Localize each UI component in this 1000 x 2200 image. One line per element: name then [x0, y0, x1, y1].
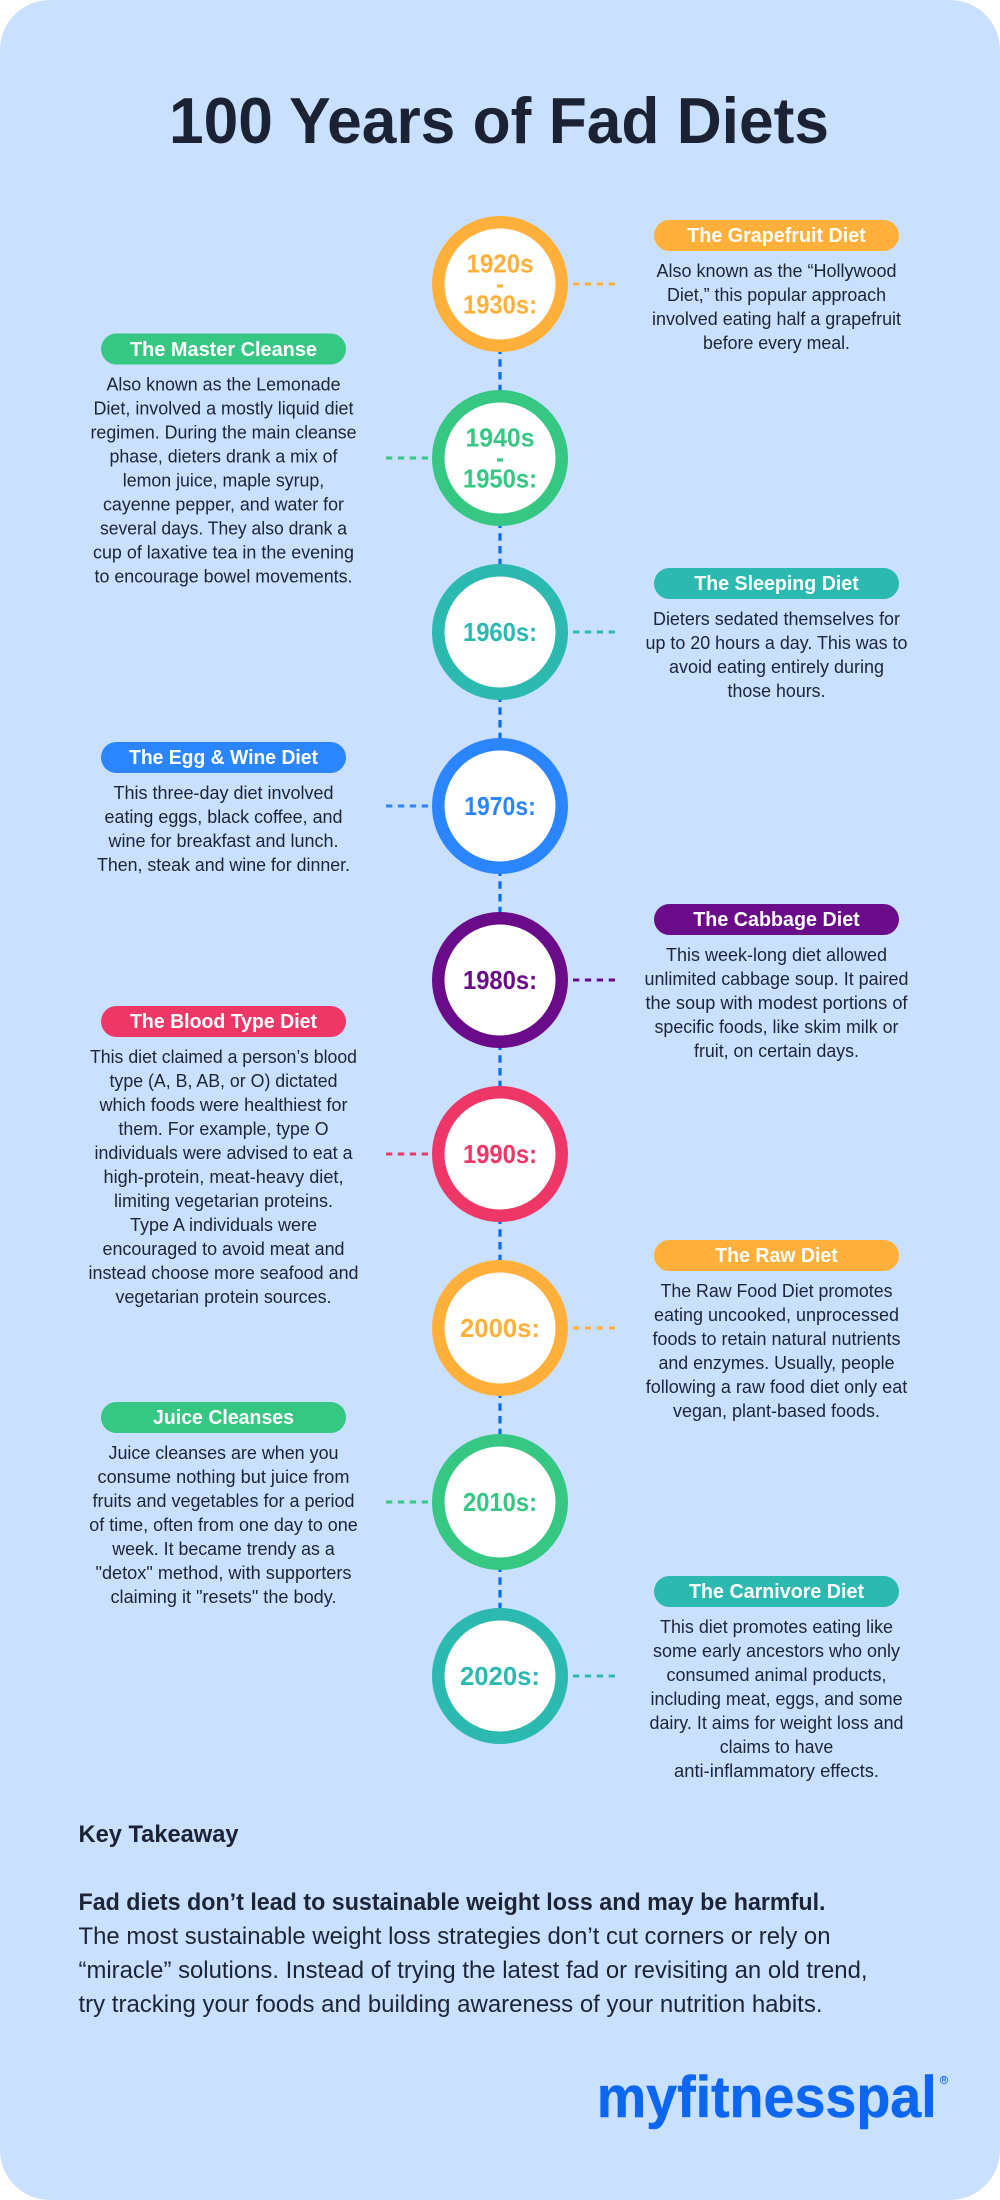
description: carnivore diet: consumed animal products, [666, 1665, 886, 1685]
year badge: 2010s [438, 1440, 562, 1564]
panel: 1940s master cleanse [90, 334, 562, 586]
dashed connector [386, 804, 428, 808]
year badge: 1920s-1930s: 1920s [466, 248, 534, 278]
description: carnivore diet [650, 1617, 904, 1781]
description: carnivore diet: This diet promotes eating like [660, 1617, 893, 1637]
pill: The Blood Type Diet [101, 1006, 346, 1037]
pill: The Egg & Wine Diet: The Egg & Wine Diet [129, 747, 318, 769]
year badge: 1970s [438, 744, 562, 868]
description: blood type diet [88, 1047, 358, 1307]
text block: key takeaway summary: The most sustainable weight loss strategies don’t cut corners or rely on [78, 1923, 830, 1950]
description: master cleanse: phase, dieters drank a mix of [110, 446, 338, 466]
year badge: 1920s-1930s [438, 222, 562, 346]
pill: The Master Cleanse: The Master Cleanse [130, 339, 317, 361]
pill: The Sleeping Diet [654, 568, 899, 599]
dashed connector [573, 282, 615, 286]
description: raw diet: and enzymes. Usually, people [658, 1353, 894, 1373]
description: juice cleanses: Juice cleanses are when you [108, 1443, 338, 1463]
description: juice cleanses [89, 1443, 358, 1607]
year badge: 1960s: 1960s: [463, 617, 537, 647]
year badge: 2000s [438, 1266, 562, 1390]
year badge: 1940s-1950s [438, 396, 562, 520]
year badge: 1940s-1950s: 1940s [466, 422, 534, 452]
timeline connectors [498, 346, 502, 1612]
pill: The Grapefruit Diet [654, 220, 899, 251]
description: master cleanse: cup of laxative tea in the evening [93, 542, 354, 562]
description: juice cleanses: of time, often from one day to one [89, 1515, 358, 1535]
panel: 1920s grapefruit diet [438, 220, 901, 353]
description: blood type diet: instead choose more seafood and [88, 1263, 358, 1283]
dashed connector [386, 1152, 428, 1156]
description: cabbage diet: specific foods, like skim milk or [654, 1017, 899, 1037]
dashed connector [573, 630, 615, 634]
pill: The Raw Diet [654, 1240, 899, 1271]
description: grapefruit: involved eating half a grapefruit [652, 309, 901, 329]
description: sleeping diet [646, 609, 908, 701]
pill: The Master Cleanse [101, 334, 346, 364]
pill: The Cabbage Diet [654, 904, 899, 935]
description: juice cleanses: fruits and vegetables for a period [92, 1491, 354, 1511]
year badge: 1960s [438, 570, 562, 694]
description: grapefruit [652, 261, 901, 353]
dashed connector [386, 1500, 428, 1504]
description: juice cleanses: "detox" method, with supporters [96, 1563, 352, 1583]
logo: myfitnesspal: R [942, 2078, 947, 2084]
panel: 2010s juice cleanses [89, 1402, 562, 1607]
description: grapefruit: before every meal. [703, 333, 850, 353]
text block: key takeaway summary: try tracking your foods and building awareness of your nutrition habits. [78, 1991, 822, 2018]
panel: 2000s raw diet [438, 1240, 907, 1421]
description: cabbage diet [644, 945, 908, 1061]
description: juice cleanses: week. It became trendy as a [111, 1539, 336, 1559]
pill: Juice Cleanses: Juice Cleanses [153, 1407, 294, 1429]
description: raw diet: foods to retain natural nutrients [652, 1329, 900, 1349]
description: blood type diet: them. For example, type O [118, 1119, 328, 1139]
description: sleeping diet: those hours. [728, 681, 826, 701]
description: raw diet [646, 1281, 907, 1421]
pill: The Raw Diet: The Raw Diet [715, 1245, 838, 1267]
year badge: 2000s: 2000s: [460, 1313, 540, 1343]
pill: The Carnivore Diet: The Carnivore Diet [689, 1581, 864, 1603]
description: blood type diet: limiting vegetarian proteins. [114, 1191, 333, 1211]
year badge: 1980s: 1980s: [463, 965, 537, 995]
dashed connector [386, 456, 428, 460]
year badge: 1970s: 1970s: [464, 791, 536, 821]
description: master cleanse: to encourage bowel movements. [94, 566, 352, 586]
description: blood type diet: high-protein, meat-heavy diet, [104, 1167, 344, 1187]
panel: 1980s cabbage diet [438, 904, 908, 1061]
year badge: 1980s [438, 918, 562, 1042]
description: carnivore diet: some early ancestors who only [653, 1641, 900, 1661]
description: blood type diet: This diet claimed a person’s blood [90, 1047, 357, 1067]
description: cabbage diet: This week-long diet allowed [666, 945, 887, 965]
description: raw diet: eating uncooked, unprocessed [654, 1305, 899, 1325]
year badge: 1920s-1930s: 1930s: [463, 290, 537, 320]
description: egg and wine: wine for breakfast and lunch. [108, 831, 338, 851]
description: blood type diet: which foods were healthiest for [98, 1095, 348, 1115]
description: egg and wine: This three-day diet involved [114, 783, 334, 803]
text block: key takeaway summary: “miracle” solutions. Instead of trying the latest fad or revisiting an old trend, [78, 1957, 868, 1984]
logo: myfitnesspal: myfitnesspal [597, 2065, 937, 2130]
year badge: 2020s [438, 1614, 562, 1738]
dashed connector [573, 978, 615, 982]
description: grapefruit: Diet,” this popular approach [667, 285, 886, 305]
description: blood type diet: Type A individuals were [130, 1215, 317, 1235]
description: raw diet: following a raw food diet only eat [646, 1377, 907, 1397]
description: master cleanse: Also known as the Lemonade [106, 374, 340, 394]
dashed connector [573, 1674, 615, 1678]
year badge: 2020s: 2020s: [460, 1661, 540, 1691]
description: master cleanse [90, 374, 356, 586]
description: sleeping diet: avoid eating entirely during [669, 657, 884, 677]
panel: 2020s carnivore diet [438, 1576, 904, 1781]
description: raw diet: vegan, plant-based foods. [673, 1401, 880, 1421]
description: juice cleanses: consume nothing but juice from [98, 1467, 350, 1487]
description: carnivore diet: claims to have [720, 1737, 833, 1757]
title: 100 Years of Fad Diets [169, 84, 829, 157]
pill: Juice Cleanses [101, 1402, 346, 1433]
panel: 1990s blood type diet [88, 1006, 562, 1307]
year badge: 1990s [438, 1092, 562, 1216]
pill: The Cabbage Diet: The Cabbage Diet [693, 909, 860, 931]
text block: key takeaway summary [78, 1889, 868, 2018]
pill: The Grapefruit Diet: The Grapefruit Diet [687, 225, 866, 247]
description: master cleanse: cayenne pepper, and water for [103, 494, 344, 514]
description: egg and wine: eating eggs, black coffee, and [104, 807, 342, 827]
description: carnivore diet: dairy. It aims for weight loss and [650, 1713, 904, 1733]
description: raw diet: The Raw Food Diet promotes [660, 1281, 892, 1301]
year badge: 1920s-1930s: - [496, 268, 504, 298]
text block: key takeaway summary: Fad diets don’t lead to sustainable weight loss and may be harmful. [78, 1889, 826, 1916]
description: blood type diet: encouraged to avoid meat and [102, 1239, 344, 1259]
description: blood type diet: vegetarian protein sources. [116, 1287, 332, 1307]
description: carnivore diet: anti-inflammatory effects. [674, 1761, 879, 1781]
description: master cleanse: regimen. During the main cleanse [90, 422, 356, 442]
pill: The Egg & Wine Diet [101, 742, 346, 773]
pill: The Sleeping Diet: The Sleeping Diet [694, 573, 859, 595]
description: juice cleanses: claiming it "resets" the body. [110, 1587, 336, 1607]
heading: Key Takeaway: Key Takeaway [78, 1821, 239, 1848]
year badge: 1940s-1950s: 1950s: [463, 464, 537, 494]
description: sleeping diet: Dieters sedated themselves for [653, 609, 900, 629]
description: master cleanse: lemon juice, maple syrup, [123, 470, 324, 490]
description: blood type diet: individuals were advised to eat a [94, 1143, 353, 1163]
year badge: 1990s: 1990s: [463, 1139, 537, 1169]
description: cabbage diet: unlimited cabbage soup. It paired [644, 969, 908, 989]
description: grapefruit: Also known as the “Hollywood [656, 261, 896, 281]
panel: 1970s egg and wine diet [97, 742, 562, 875]
dashed connector [573, 1326, 615, 1330]
description: master cleanse: several days. They also drank a [100, 518, 348, 538]
description: egg and wine [97, 783, 350, 875]
description: sleeping diet: up to 20 hours a day. This was to [646, 633, 908, 653]
year badge: 2010s: 2010s: [463, 1487, 537, 1517]
pill: The Carnivore Diet [654, 1576, 899, 1607]
description: blood type diet: type (A, B, AB, or O) dictated [110, 1071, 338, 1091]
description: cabbage diet: the soup with modest portions of [646, 993, 908, 1013]
description: master cleanse: Diet, involved a mostly liquid diet [94, 398, 354, 418]
description: cabbage diet: fruit, on certain days. [694, 1041, 859, 1061]
pill: The Blood Type Diet: The Blood Type Diet [130, 1011, 317, 1033]
panel: 1960s sleeping diet [438, 568, 908, 701]
description: egg and wine: Then, steak and wine for dinner. [97, 855, 350, 875]
description: carnivore diet: including meat, eggs, and some [650, 1689, 902, 1709]
year badge: 1940s-1950s: - [496, 442, 504, 472]
